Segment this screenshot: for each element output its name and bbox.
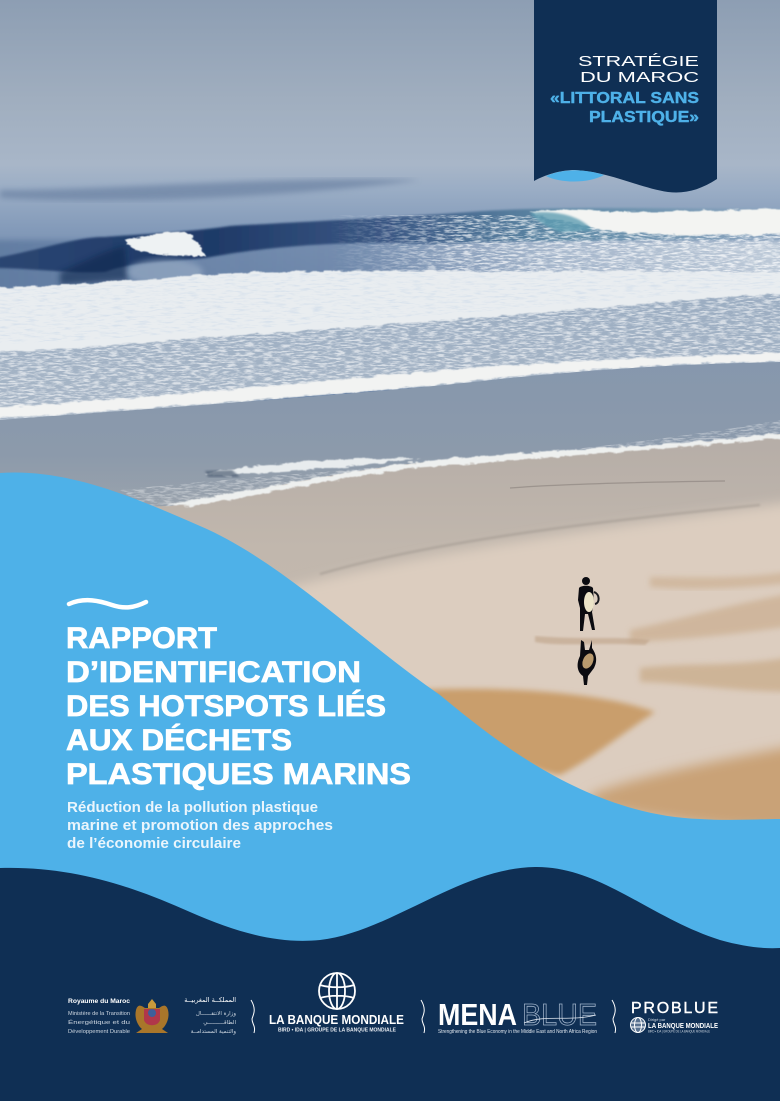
title: D’IDENTIFICATION (66, 656, 361, 689)
dry light sand (280, 500, 780, 900)
icon: small globe (630, 1018, 646, 1032)
white crest left (124, 231, 206, 256)
title: PLASTIQUES MARINS (66, 758, 411, 791)
logo: PROBLUE: BIRD • IDA | GROUPE DE LA BANQUE MONDIALE (648, 1030, 711, 1034)
subtitle (67, 799, 333, 852)
separator (251, 1000, 255, 1033)
logo: Royaume du Maroc: Royaume du Maroc (68, 998, 131, 1005)
separator (612, 1000, 616, 1033)
calm water (0, 362, 780, 530)
logo: La Banque Mondiale: LA BANQUE MONDIALE (269, 1013, 404, 1027)
banner text: STRATÉGIE (578, 53, 699, 70)
logo: PROBLUE (630, 1000, 718, 1034)
logo: Royaume du Maroc: والتنمية المستدامــة (191, 1029, 236, 1035)
logo: PROBLUE: LA BANQUE MONDIALE (648, 1021, 718, 1030)
subtitle: de l’économie circulaire (67, 835, 241, 852)
separator (421, 1000, 425, 1033)
logo: MENA Blue: Strengthening the Blue Economy in the Middle East and North Africa Region (438, 1029, 597, 1035)
speckled mid water (0, 285, 780, 425)
logo: MENA Blue (438, 997, 597, 1035)
reflection patch (127, 259, 203, 285)
title: DES HOTSPOTS LIÉS (66, 689, 386, 723)
logo: Royaume du Maroc: الطاقــــــــــي (203, 1020, 236, 1026)
water behind wave (0, 240, 780, 300)
subtitle: marine et promotion des approches (67, 817, 333, 834)
logo: PROBLUE: PROBLUE (631, 1000, 718, 1017)
title: RAPPORT (66, 622, 217, 655)
top banner (534, 0, 717, 192)
logo: Royaume du Maroc: المملكــة المغربيــة (184, 996, 236, 1004)
logo: Royaume du Maroc: Développement Durable (68, 1029, 130, 1035)
surfer and reflection (578, 577, 599, 685)
shore foam (165, 432, 780, 506)
logo: PROBLUE: Dirigé par (648, 1017, 666, 1022)
banner text: DU MAROC (580, 70, 699, 86)
logo: Royaume du Maroc: Énergétique et du (68, 1019, 130, 1026)
icon: globe (319, 973, 355, 1009)
title: AUX DÉCHETS (66, 723, 292, 757)
foam band upper (0, 271, 780, 352)
logo: Royaume du Maroc: Ministère de la Transition (68, 1011, 130, 1017)
banner light blue accent (546, 170, 604, 182)
white crest right (530, 208, 780, 235)
title (66, 622, 411, 791)
breaking wave (0, 208, 780, 285)
wet sand streaks (510, 481, 725, 488)
logo: La Banque Mondiale (269, 973, 404, 1034)
logo: Royaume du Maroc (68, 996, 236, 1035)
foam band lower (0, 352, 780, 419)
logo: Royaume du Maroc: وزارة الانتقــــــال (196, 1011, 236, 1017)
distant swell (0, 179, 420, 200)
decorative title squiggle (69, 600, 146, 607)
banner text: PLASTIQUE» (589, 109, 699, 126)
subtitle: Réduction de la pollution plastique (67, 799, 318, 816)
light blue wave panel (0, 472, 780, 960)
logo: MENA Blue: BLUE (522, 997, 597, 1032)
logo: La Banque Mondiale: BIRD • IDA | GROUPE DE LA BANQUE MONDIALE (278, 1028, 397, 1034)
banner text (550, 53, 699, 126)
icon: coat of arms (135, 999, 169, 1033)
logo: MENA Blue: MENA (438, 997, 517, 1032)
sand (0, 434, 780, 1000)
dark blue wave footer (0, 867, 780, 1101)
banner text: «LITTORAL SANS (550, 90, 699, 107)
orange sand patches (420, 689, 655, 775)
